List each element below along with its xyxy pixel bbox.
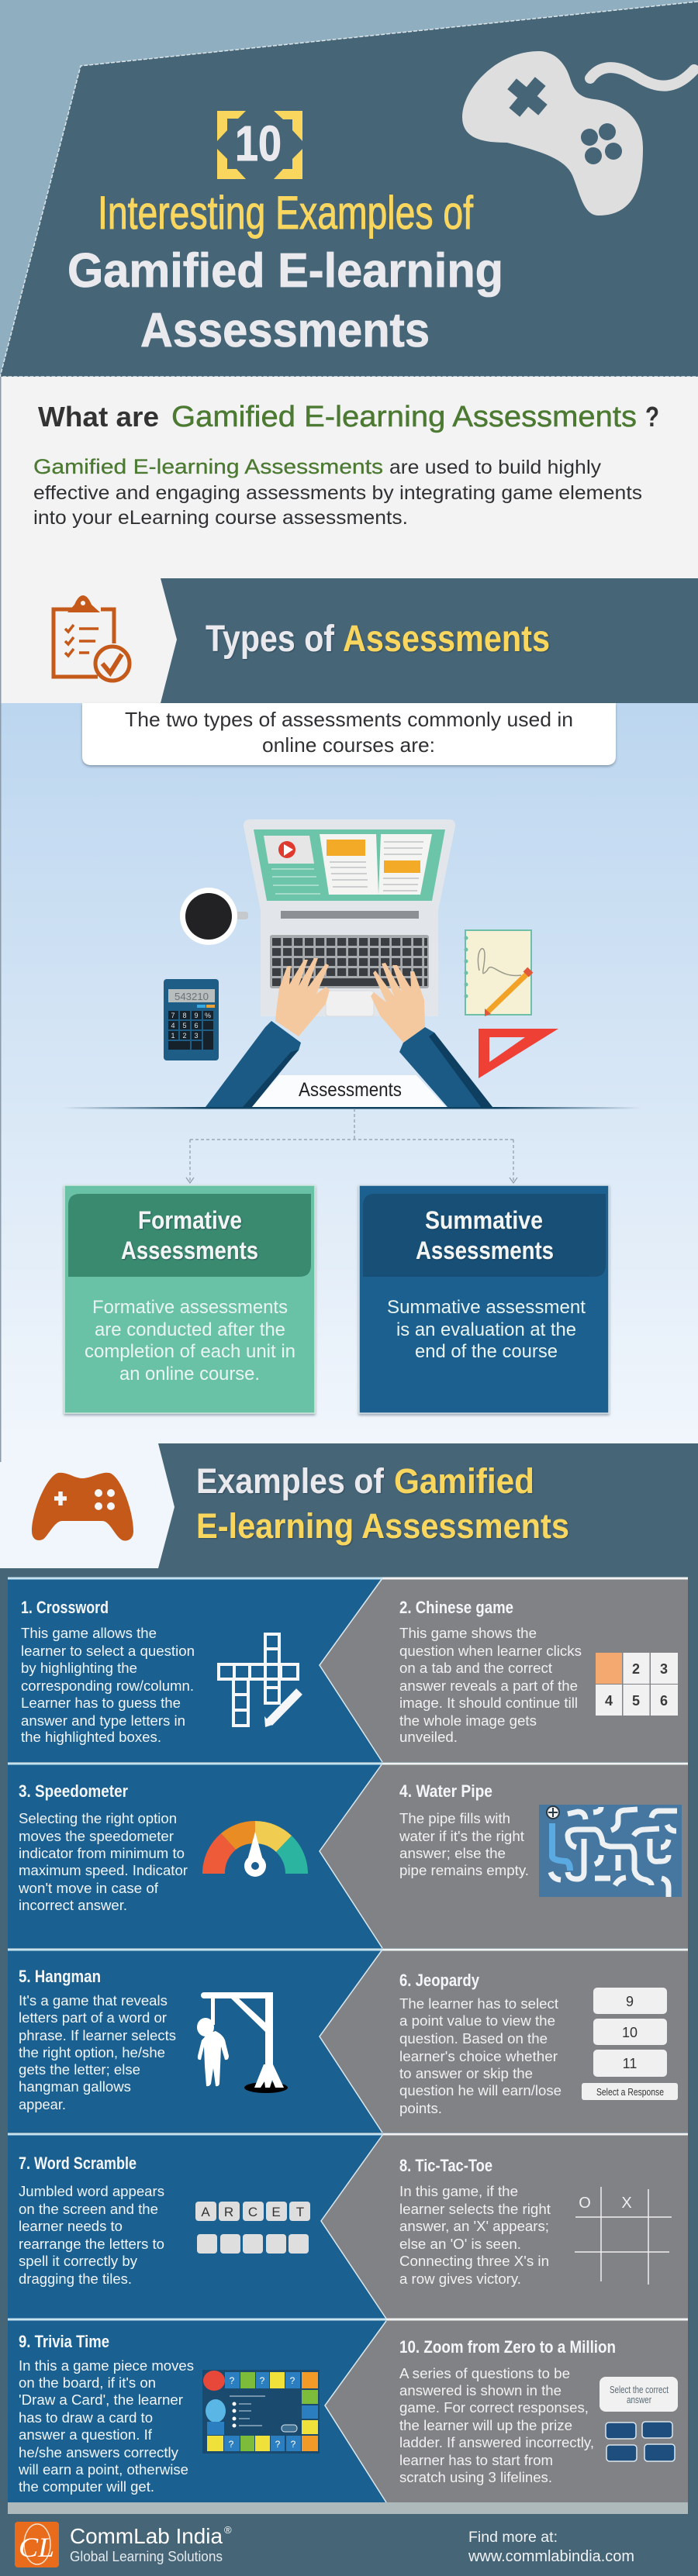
icon: calculator: % [205,1012,211,1019]
icon: number tiles: 4 [605,1693,613,1709]
text block: chinese game: answer reveals a part of the [399,1678,578,1694]
panel: row 3 [8,1949,688,2133]
heading band: types of assessments [54,578,698,703]
icon: number tiles [596,1653,678,1716]
icon: trivia game board [202,2370,320,2454]
callout: intro text [82,703,616,765]
icon: calculator: 7 [171,1012,175,1019]
panel: row 2 [8,1763,688,1948]
text block: hangman: 5. Hangman [19,1967,101,1986]
text block: chinese game: question when learner clicks [399,1643,582,1659]
text block: word scramble: rearrange the letters to [19,2236,164,2252]
icon: calculator: 8 [182,1012,187,1019]
icon: trivia game board: ? [260,2375,265,2386]
text block: definition paragraph: into your eLearning course assessments. [33,507,408,529]
text block: zoom from zero: game. For correct responses, [399,2399,589,2416]
text block: crossword: This game allows the [21,1625,157,1641]
icon: number tiles: 3 [660,1661,668,1677]
heading: what are: ? [645,401,659,433]
text block: jeopardy: learner's choice whether [399,2048,558,2064]
text block: trivia time: the computer will get. [19,2478,154,2495]
text block: jeopardy: to answer or skip the [399,2065,533,2081]
icon: number ten bracket [217,111,302,179]
logo: commlab india: CL [19,2532,54,2563]
text block: trivia time: 'Draw a Card', the learner [19,2392,183,2408]
heading: what are: What are [38,401,159,433]
icon: hangman gallows [197,1992,288,2093]
text block: crossword [21,1598,195,1745]
text block: chinese game: unveiled. [399,1729,458,1745]
icon: number tiles: 5 [632,1693,640,1709]
footer strip [8,2502,688,2514]
text block: crossword: 1. Crossword [21,1598,109,1617]
text block: water pipe: The pipe fills with [399,1810,510,1826]
text block: speedometer: indicator from minimum to [19,1845,185,1861]
callout: intro text: online courses are: [262,733,435,757]
text block: speedometer: maximum speed. Indicator [19,1862,188,1878]
text block: hangman: phrase. If learner selects [19,2027,176,2043]
icon: left hand [275,958,330,1036]
icon: calculator: 4 [171,1022,175,1029]
text block: water pipe: answer; else the [399,1845,506,1861]
text block: trivia time: In this a game piece moves [19,2357,194,2374]
icon: crossword and pencil [219,1634,299,1727]
icon: letter tiles: R [224,2205,233,2219]
text block: jeopardy [399,1971,562,2116]
panel: row 1 [8,1578,688,1762]
text block: jeopardy: question. Based on the [399,2030,548,2047]
text block: speedometer: incorrect answer. [19,1897,127,1913]
icon: point value buttons: 9 [626,1994,634,2009]
logo: commlab india: ® [224,2524,232,2536]
icon: letter tiles: E [271,2205,281,2219]
text block: tic-tac-toe: answer, an 'X' appears; [399,2218,549,2234]
text block: crossword: answer and type letters in [21,1712,185,1729]
text block: trivia time: will earn a point, otherwise [18,2461,188,2478]
heading: formative: Formative [138,1206,242,1234]
text block: crossword: by highlighting the [21,1660,137,1676]
icon: letter tiles: C [248,2205,257,2219]
text block: hangman: hangman gallows [19,2078,131,2095]
icon: speedometer gauge [202,1821,308,1877]
callout: intro text: The two types of assessments commonly used in [125,708,573,731]
heading: title text: Interesting Examples of [98,187,473,239]
icon: game controller [462,51,694,216]
icon: calculator: 1 [171,1032,175,1040]
text block: word scramble: dragging the tiles. [19,2271,132,2287]
text block: formative body [85,1297,295,1385]
text block: hangman: letters part of a word or [19,2009,167,2026]
text block: speedometer: moves the speedometer [19,1828,174,1844]
text block: word scramble [19,2154,164,2287]
text block: trivia time: on the board, if it's on [19,2374,156,2391]
text block: crossword: the highlighted boxes. [21,1729,161,1745]
text block: hangman [19,1967,176,2112]
text block: word scramble: 7. Word Scramble [19,2154,136,2173]
icon: calculator: 6 [194,1022,199,1029]
heading: title text: Assessments [140,304,430,357]
text block: jeopardy: question he will earn/lose [399,2082,562,2098]
icon: point value buttons: Select a Response [596,2086,664,2098]
text block: water pipe: pipe remains empty. [399,1862,529,1878]
heading: summative: Summative [425,1206,543,1234]
icon: number ten bracket: 10 [235,116,282,171]
text block: chinese game [399,1598,582,1745]
icon: trivia game board: ? [290,2375,295,2386]
icon: calculator: 3 [194,1032,199,1040]
panel: row 4 [8,2133,688,2319]
icon: calculator: 2 [182,1032,187,1040]
text block: tic-tac-toe [399,2156,551,2287]
text block: water pipe: 4. Water Pipe [399,1781,492,1801]
heading: title text [67,187,503,357]
logo: commlab india: CommLab India [70,2524,223,2548]
text block: zoom from zero: A series of questions to be [399,2365,570,2381]
text block: word scramble: spell it correctly by [19,2253,138,2269]
panel: definition [0,377,698,703]
text block: zoom from zero: ladder. If answered incorrectly, [399,2434,594,2450]
text block: water pipe: water if it's the right [399,1828,524,1844]
text block: website [468,2529,634,2565]
icon: quiz answer options [600,2377,678,2461]
icon: set square [479,1029,558,1078]
text block: definition paragraph [33,455,642,529]
text block: chinese game: This game shows the [399,1625,537,1641]
panel: row 5 [8,2319,688,2502]
icon: letter tiles [195,2202,310,2254]
heading: examples text: E-learning Assessments [196,1506,569,1546]
heading: formative: Assessments [121,1236,258,1264]
heading: types text [206,619,550,660]
text block: zoom from zero: learner has to start from [399,2452,553,2468]
text block: jeopardy: points. [399,2100,442,2116]
icon: calculator [164,979,219,1060]
heading: examples text [196,1461,569,1546]
icon: point value buttons: 10 [622,2025,638,2040]
heading: what are: Gamified E-learning Assessments [171,401,637,433]
text block: trivia time [18,2332,194,2495]
text block: definition paragraph: are used to build highly [389,457,602,478]
icon: notepad and pen [464,930,533,1016]
icon: calculator: 9 [194,1012,199,1019]
text block: chinese game: 2. Chinese game [399,1598,513,1617]
text block: summative body: is an evaluation at the [396,1319,576,1340]
text block: chinese game: image. It should continue till [399,1695,578,1711]
icon: sleeves [206,1021,492,1107]
icon: quiz answer options: Select the correct [610,2385,669,2395]
heading: formative [121,1206,258,1264]
text block: zoom from zero: the learner will up the prize [399,2417,572,2433]
icon: calculator: 543210 [174,991,209,1002]
icon: number tiles: 2 [632,1661,640,1677]
text block: tic-tac-toe: In this game, if the [399,2183,518,2199]
text block: trivia time: he/she answers correctly [19,2444,179,2460]
text block: definition paragraph: Gamified E-learning Assessments [33,455,383,478]
logo: commlab india [15,2522,232,2567]
icon: trivia game board: ? [230,2375,235,2386]
text block: hangman: It's a game that reveals [19,1992,168,2009]
text block: hangman: the right option, he/she [19,2044,165,2060]
icon: clipboard checklist [54,595,130,681]
text block: trivia time: has to draw a card to [19,2409,153,2426]
heading: title text: Gamified E-learning [67,244,503,298]
icon: point value buttons [582,1988,678,2100]
icon: quiz answer options: answer [627,2395,651,2405]
text block: speedometer: Selecting the right option [19,1810,177,1826]
icon: trivia game board: ? [291,2439,296,2450]
text block: speedometer: 3. Speedometer [19,1781,128,1801]
icon: letter tiles: T [296,2205,304,2219]
text block: summative body: end of the course [415,1341,558,1362]
text block: jeopardy: 6. Jeopardy [399,1971,480,1990]
text block: trivia time: answer a question. If [19,2426,153,2443]
text block: tic-tac-toe: a row gives victory. [399,2271,521,2287]
text block: tic-tac-toe: Connecting three X's in [399,2253,549,2269]
heading: examples text: Examples of [196,1461,385,1501]
text block: trivia time: 9. Trivia Time [19,2332,109,2351]
icon: calculator: 5 [182,1022,187,1029]
text block: crossword: Learner has to guess the [21,1695,181,1711]
text block: word scramble: on the screen and the [19,2201,158,2217]
text block: summative body: Summative assessment [387,1297,586,1318]
text block: speedometer: won't move in case of [18,1880,159,1896]
text block: tic-tac-toe: learner selects the right [399,2201,551,2217]
text block: zoom from zero: answered is shown in the [399,2382,562,2398]
text block: formative body: are conducted after the [95,1319,285,1340]
icon: trivia game board: ? [229,2439,234,2450]
heading: types text: Assessments [343,619,550,660]
text block: word scramble: learner needs to [19,2218,123,2234]
icon: trivia game board: ? [275,2439,281,2450]
panel: summative assessments [359,1185,609,1413]
icon: letter tiles: A [201,2205,210,2219]
icon: water pipe puzzle [539,1805,682,1897]
icon: tic-tac-toe grid [575,2187,672,2285]
text block: summative body [387,1297,586,1362]
icon: tic-tac-toe grid: X [621,2195,632,2212]
icon: right hand [371,963,425,1043]
text block: zoom from zero: scratch using 3 lifelines. [399,2469,552,2485]
text block: crossword: corresponding row/column. [21,1678,194,1694]
illustration: desk with laptop [62,819,641,1109]
logo: commlab india: Global Learning Solutions [70,2549,223,2564]
text block: crossword: learner to select a question [21,1643,195,1659]
heading band: examples [0,1443,569,1568]
text block: formative body: an online course. [119,1364,260,1385]
icon: tic-tac-toe grid: O [579,2195,591,2212]
text block: website: Find more at: [468,2529,558,2546]
text block: jeopardy: a point value to view the [399,2012,555,2029]
icon: coffee cup [180,888,248,945]
text block: website: www.commlabindia.com [468,2548,634,2565]
icon: laptop [244,819,455,1016]
panel: types of assessments background [0,703,698,1443]
text block: formative body: Formative assessments [92,1297,288,1318]
footer [15,2522,634,2567]
label: assessments: Assessments [299,1079,402,1101]
icon: point value buttons: 11 [623,2056,637,2071]
text block: speedometer [18,1781,188,1913]
text block: hangman: gets the letter; else [19,2061,140,2078]
panel: title header [0,0,698,377]
text block: tic-tac-toe: else an 'O' is seen. [399,2236,521,2252]
text block: chinese game: on a tab and the correct [399,1660,552,1676]
label: assessments [252,1075,446,1107]
text block: definition paragraph: effective and engaging assessments by integrating game elements [33,482,642,504]
heading: summative: Assessments [416,1236,554,1264]
text block: hangman: appear. [19,2096,66,2112]
icon: number tiles: 6 [660,1693,668,1709]
panel: formative assessments [64,1185,315,1413]
icon: gamepad [32,1473,133,1541]
text block: chinese game: the whole image gets [399,1712,537,1729]
text block: jeopardy: The learner has to select [399,1995,558,2012]
text block: water pipe [399,1781,529,1878]
heading: types text: Types of [206,619,335,660]
text block: formative body: completion of each unit in [85,1341,295,1362]
heading: summative [416,1206,554,1264]
text block: tic-tac-toe: 8. Tic-Tac-Toe [399,2156,492,2175]
text block: zoom from zero [399,2337,616,2485]
text block: word scramble: Jumbled word appears [19,2183,164,2199]
connector: dashed arrows [186,1109,517,1183]
text block: zoom from zero: 10. Zoom from Zero to a Million [399,2337,616,2357]
heading: examples text: Gamified [394,1461,534,1501]
